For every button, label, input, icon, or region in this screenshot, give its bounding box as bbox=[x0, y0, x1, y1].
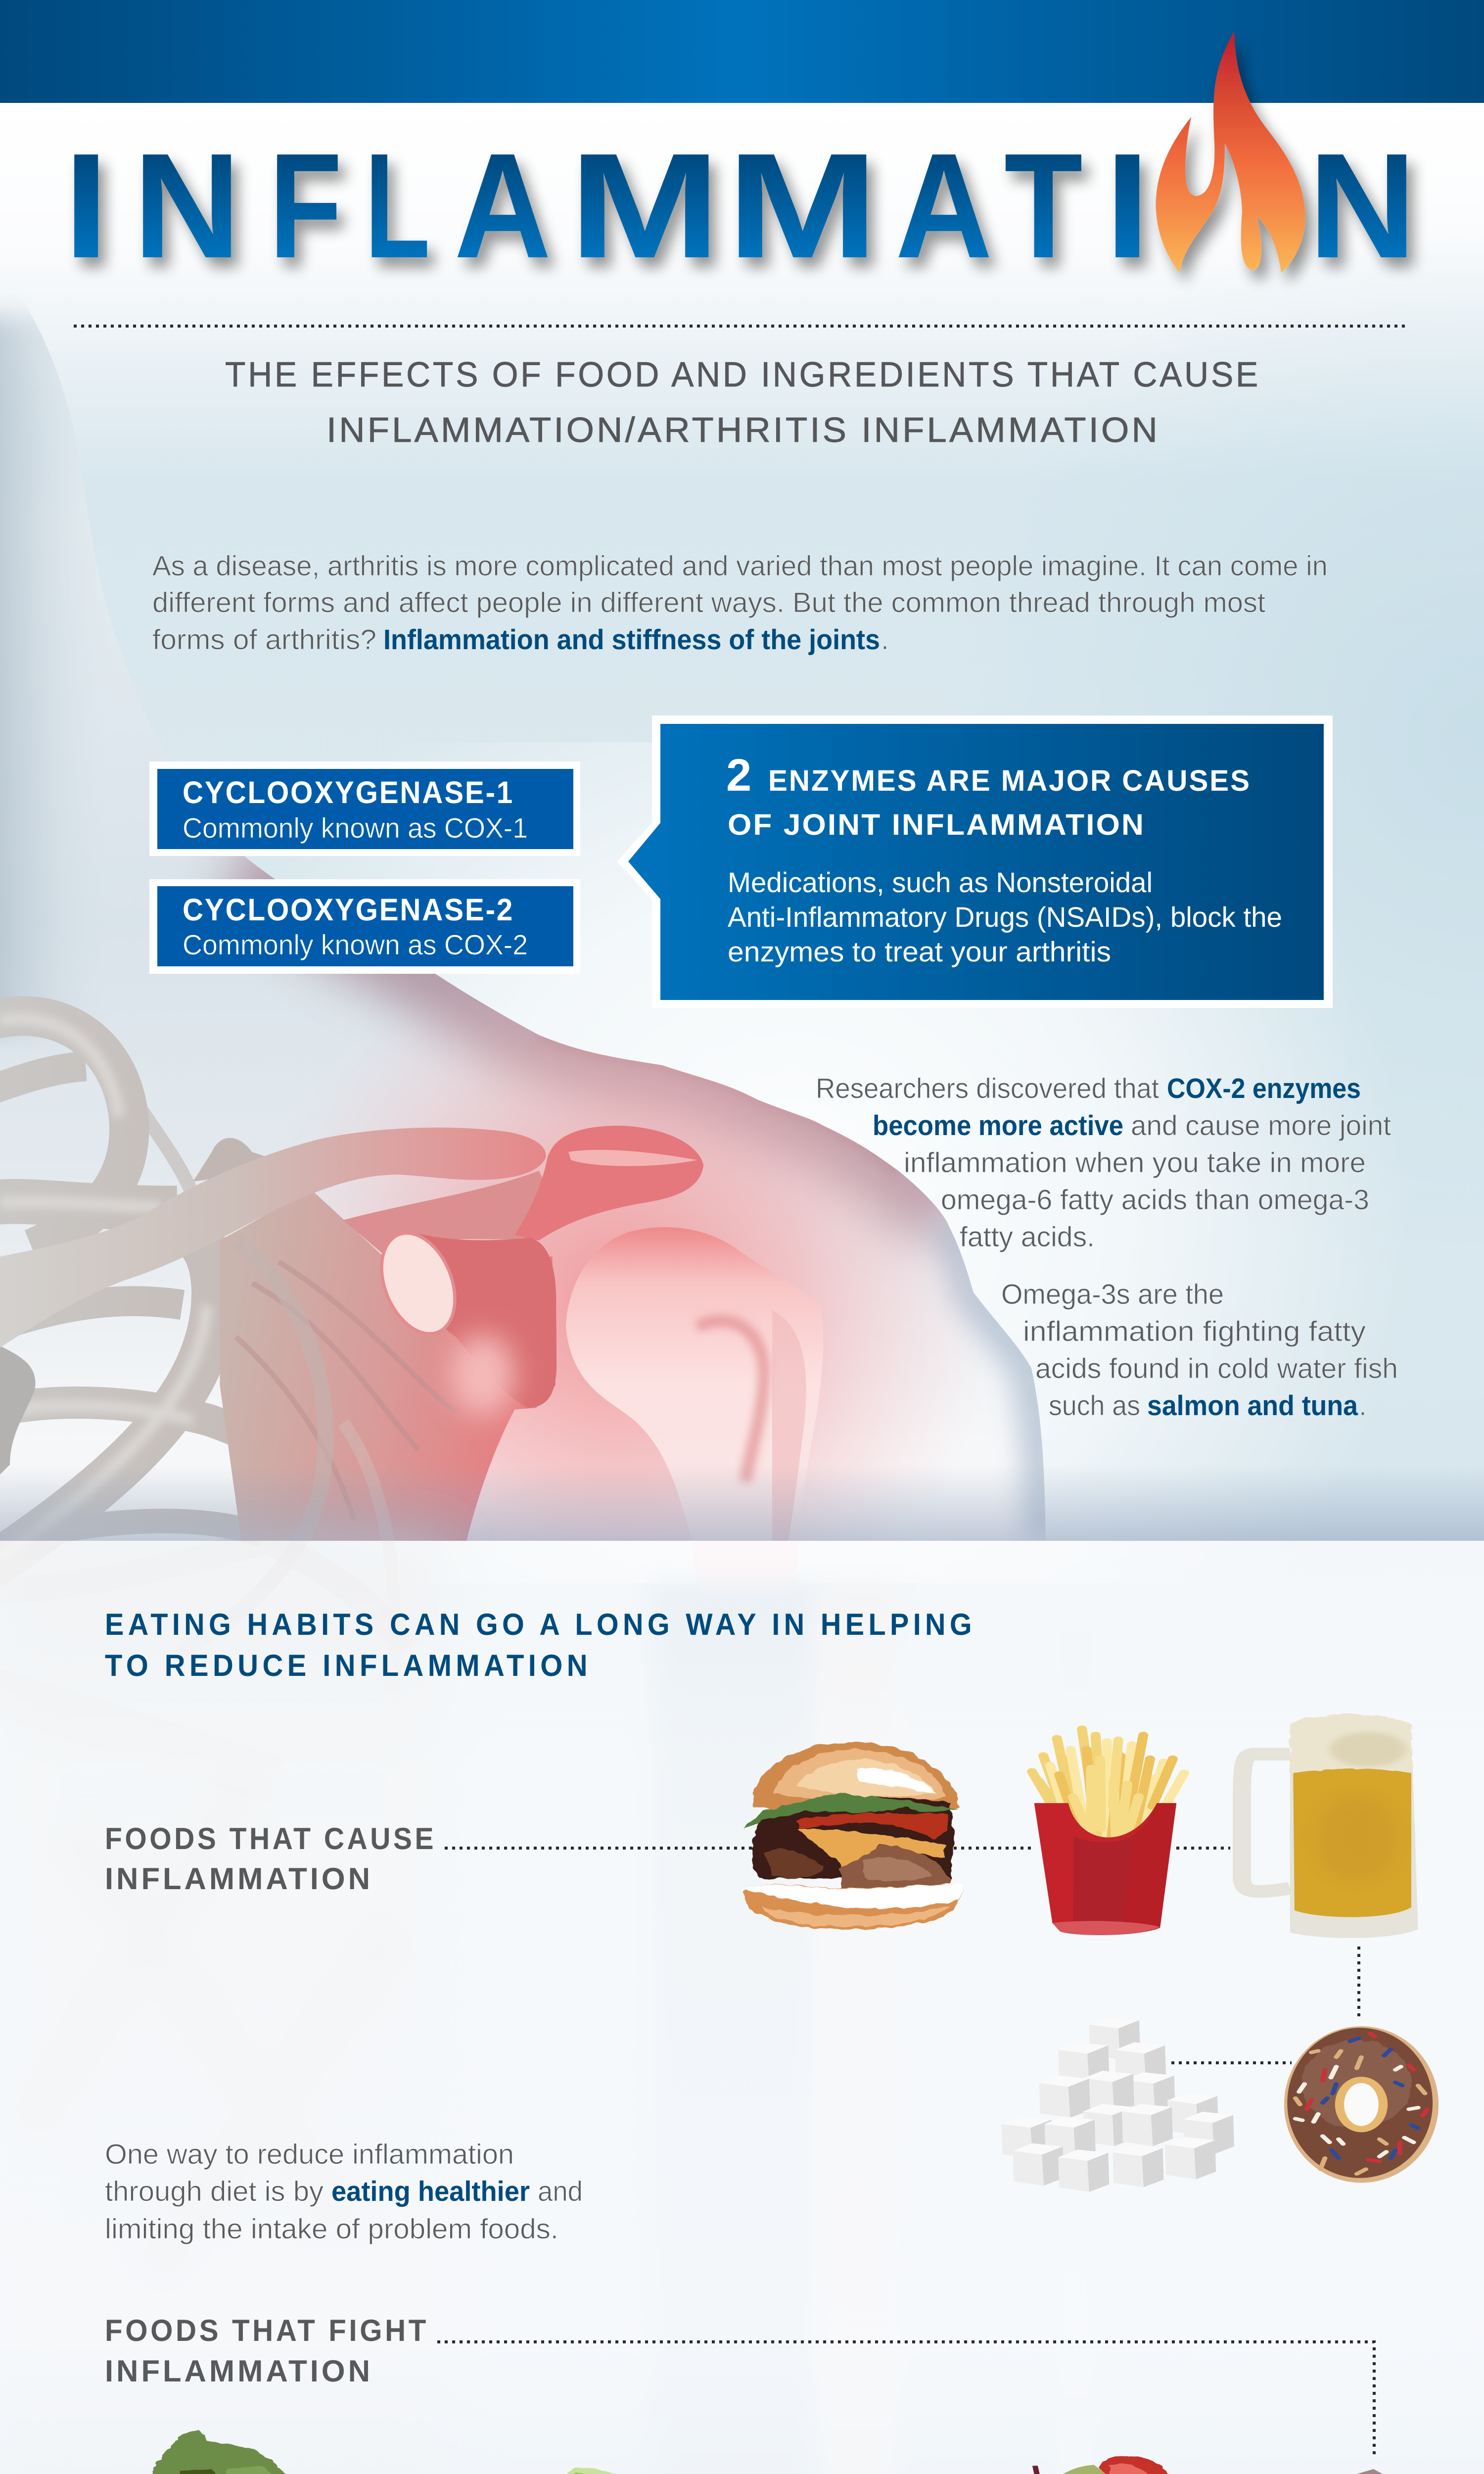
text block: COX-2 research: become more active bbox=[873, 1110, 1123, 1142]
text block: COX-2 research: fatty acids. bbox=[960, 1221, 1095, 1253]
vertebra bbox=[0, 1346, 36, 1475]
heading: foods that cause inflammation bbox=[105, 1822, 436, 1896]
humerus bbox=[566, 1227, 823, 1781]
text block: omega-3s: . bbox=[1359, 1390, 1367, 1422]
intro paragraph: forms of arthritis? bbox=[152, 624, 376, 656]
text block: COX-2 research: and cause more joint bbox=[1131, 1110, 1391, 1142]
text block: omega-3s: Omega-3s are the bbox=[1001, 1279, 1224, 1310]
clavicle bbox=[0, 1128, 546, 1348]
text block: omega-3s: salmon and tuna bbox=[1147, 1390, 1358, 1422]
callout: 2 enzymes: Anti-Inflammatory Drugs (NSAIDs), block the bbox=[728, 902, 1282, 933]
glenoid socket bbox=[368, 1222, 556, 1415]
text block: COX-2 research bbox=[816, 1073, 1391, 1253]
title: F bbox=[269, 122, 342, 289]
callout: 2 enzymes bbox=[617, 715, 1333, 1008]
heading: foods that cause inflammation: FOODS THAT CAUSE bbox=[105, 1822, 436, 1856]
text block: COX-2 research: omega-6 fatty acids than omega-3 bbox=[941, 1184, 1369, 1216]
box: cyclooxygenase-1 bbox=[149, 761, 580, 856]
heading: foods that cause inflammation: INFLAMMATION bbox=[105, 1862, 373, 1896]
title: I bbox=[63, 122, 109, 289]
heading: eating habits bbox=[105, 1608, 976, 1683]
top blue band bbox=[0, 0, 1484, 103]
heading: foods that fight inflammation: FOODS THAT FIGHT bbox=[105, 2314, 429, 2348]
title: M bbox=[727, 122, 879, 289]
icon: french fries bbox=[1032, 1729, 1184, 1935]
title: L bbox=[365, 122, 430, 289]
box: cyclooxygenase-2: CYCLOOXYGENASE-2 bbox=[183, 893, 514, 927]
title: I bbox=[1105, 122, 1150, 289]
icon: flame as letter O bbox=[1156, 31, 1305, 273]
illustration: shoulder joint bbox=[0, 257, 1484, 1781]
panel: eating habits bbox=[0, 1541, 1484, 2474]
callout: 2 enzymes: ENZYMES ARE MAJOR CAUSES bbox=[768, 764, 1251, 797]
connector lines: cause foods bbox=[445, 1848, 1359, 2063]
fog above panel bbox=[0, 1465, 1484, 1541]
callout: 2 enzymes: enzymes to treat your arthritis bbox=[728, 936, 1111, 968]
callout: 2 enzymes: Medications, such as Nonsteroidal bbox=[728, 867, 1153, 899]
ribs bbox=[0, 1016, 408, 1781]
box: cyclooxygenase-2 bbox=[149, 879, 580, 974]
subtitle: THE EFFECTS OF FOOD AND INGREDIENTS THAT CAUSE bbox=[225, 355, 1260, 394]
connector lines: fighting foods bbox=[331, 2342, 1374, 2474]
dotted divider bbox=[74, 325, 1405, 328]
title bbox=[63, 31, 1416, 289]
icon: sugar cubes bbox=[1002, 2017, 1234, 2192]
subtitle bbox=[225, 355, 1260, 450]
icon: salmon with lemon bbox=[33, 2430, 407, 2474]
text block: eating healthier: limiting the intake of problem foods. bbox=[105, 2213, 558, 2245]
box: cyclooxygenase-2: Commonly known as COX-2 bbox=[183, 929, 528, 961]
callout: 2 enzymes: 2 bbox=[726, 750, 751, 801]
icon: beer mug bbox=[1242, 1713, 1418, 1938]
scapula bbox=[177, 1138, 563, 1691]
icon: dark chocolate bbox=[1255, 2469, 1441, 2474]
heading: foods that fight inflammation: INFLAMMATION bbox=[105, 2354, 373, 2388]
title: T bbox=[1004, 122, 1083, 289]
body silhouette bbox=[0, 306, 1046, 1541]
intro paragraph: Inflammation and stiffness of the joints bbox=[383, 624, 880, 656]
box: cyclooxygenase-1: CYCLOOXYGENASE-1 bbox=[183, 775, 514, 810]
text block: omega-3s bbox=[1001, 1279, 1398, 1422]
intro paragraph: different forms and affect people in different ways. But the common thread through most bbox=[152, 587, 1265, 618]
text block: omega-3s: inflammation fighting fatty bbox=[1023, 1316, 1366, 1347]
text block: eating healthier bbox=[105, 2139, 583, 2245]
icon: burger bbox=[743, 1742, 965, 1929]
title: N bbox=[133, 122, 241, 289]
icon: lettuce bbox=[468, 2468, 705, 2474]
text block: eating healthier: eating healthier bbox=[331, 2176, 530, 2207]
text block: eating healthier: and bbox=[538, 2176, 583, 2207]
title: A bbox=[454, 122, 551, 289]
box: cyclooxygenase-1: Commonly known as COX-1 bbox=[183, 812, 528, 844]
lower blurred bones bbox=[0, 1541, 1484, 2474]
subtitle: INFLAMMATION/ARTHRITIS INFLAMMATION bbox=[326, 411, 1160, 450]
acromion bbox=[515, 1126, 703, 1240]
intro paragraph bbox=[152, 550, 1328, 656]
callout: 2 enzymes: OF JOINT INFLAMMATION bbox=[728, 808, 1145, 841]
title: A bbox=[895, 122, 992, 289]
text block: eating healthier: One way to reduce inflammation bbox=[105, 2139, 514, 2170]
text block: omega-3s: acids found in cold water fish bbox=[1035, 1353, 1398, 1384]
heading: foods that fight inflammation bbox=[105, 2314, 429, 2388]
text block: eating healthier: through diet is by bbox=[105, 2176, 324, 2207]
text block: COX-2 research: inflammation when you take in more bbox=[904, 1147, 1366, 1179]
icon: red apples bbox=[967, 2456, 1193, 2474]
title: N bbox=[1308, 122, 1416, 289]
heading: eating habits: EATING HABITS CAN GO A LONG WAY IN HELPING bbox=[105, 1608, 976, 1642]
text block: COX-2 research: COX-2 enzymes bbox=[1167, 1073, 1361, 1104]
icon: chocolate donut bbox=[1284, 2026, 1438, 2183]
text block: COX-2 research: Researchers discovered that bbox=[816, 1073, 1159, 1104]
heading: eating habits: TO REDUCE INFLAMMATION bbox=[105, 1649, 592, 1683]
intro paragraph: As a disease, arthritis is more complicated and varied than most people imagine. It can come in bbox=[152, 550, 1328, 582]
title: M bbox=[569, 122, 721, 289]
text block: omega-3s: such as bbox=[1049, 1390, 1140, 1422]
intro paragraph: . bbox=[881, 624, 889, 656]
